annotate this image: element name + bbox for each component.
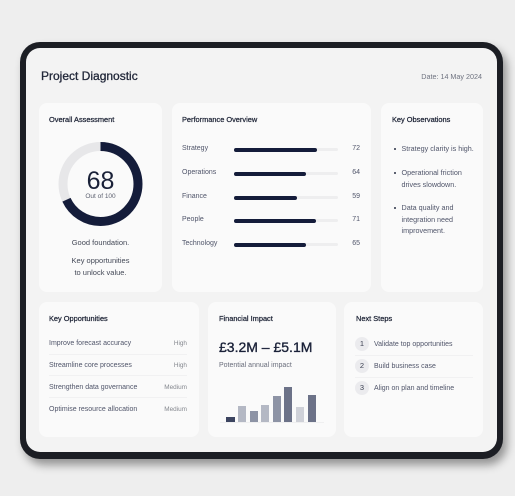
bar: operations: [234, 172, 338, 175]
row: operations: [182, 168, 360, 176]
panel: performance overview: [172, 103, 371, 292]
step 2: Build business case: [374, 363, 436, 370]
observation 1: Strategy clarity is high.: [402, 144, 474, 153]
row: people: 71: [352, 216, 360, 223]
row: people: [182, 216, 360, 223]
bar: technology: [234, 243, 338, 246]
donut gauge: [58, 142, 142, 226]
panel: key opportunities: [39, 302, 199, 437]
row: people: People: [182, 216, 204, 223]
row: strategy: [182, 145, 360, 152]
opportunity 4: Optimise resource allocation: [49, 406, 137, 413]
row: operations: 64: [352, 169, 360, 176]
panel: next steps: [344, 302, 483, 437]
panel: overall assessment: [39, 103, 162, 292]
observation 3: [394, 203, 453, 235]
donut gauge: 68: [87, 167, 114, 195]
assessment summary: Key opportunities: [72, 256, 129, 265]
row: strategy: Strategy: [182, 145, 208, 152]
opportunity 2: Streamline core processes: [49, 362, 132, 369]
opportunity 1: Improve forecast accuracy: [49, 340, 131, 347]
step 3: [355, 381, 454, 395]
step 3: Align on plan and timeline: [374, 385, 454, 392]
step 3: 3: [360, 383, 364, 392]
opportunity 2: High: [174, 362, 187, 369]
row: finance: 59: [352, 193, 360, 200]
observation 2: [394, 168, 462, 189]
bar chart: [220, 387, 324, 423]
heading: financial impact: Financial Impact: [219, 314, 273, 323]
step 1: 1: [360, 339, 364, 348]
assessment summary: to unlock value.: [74, 268, 127, 276]
step 1: [355, 337, 452, 351]
step 1: Validate top opportunities: [374, 341, 452, 348]
row: technology: 65: [352, 240, 360, 247]
heading: overall assessment: Overall Assessment: [49, 115, 114, 124]
row: technology: [182, 240, 360, 247]
row: finance: Finance: [182, 193, 207, 200]
observation 3: improvement.: [402, 226, 445, 235]
opportunity 4: Medium: [164, 406, 187, 413]
bar: people: [234, 219, 338, 222]
heading: performance overview: Performance Overview: [182, 115, 257, 124]
panel: financial impact: [208, 302, 336, 437]
row: strategy: 72: [352, 145, 360, 152]
assessment summary: [72, 238, 130, 276]
panel: key observations: [381, 103, 483, 292]
opportunity 1: [49, 340, 187, 347]
opportunity 3: Medium: [164, 384, 187, 391]
date: Date: 14 May 2024: [421, 72, 482, 81]
opportunity 2: [49, 362, 187, 369]
bar: strategy: [234, 148, 338, 151]
step 2: [355, 359, 436, 373]
step 2: 2: [360, 361, 364, 370]
tablet frame: [20, 42, 503, 459]
row: operations: Operations: [182, 169, 216, 176]
title: Project Diagnostic: [41, 69, 138, 83]
observation 2: drives slowdown.: [402, 180, 456, 189]
observation 3: Data quality and: [402, 203, 453, 212]
heading: key observations: Key Observations: [392, 115, 450, 124]
impact caption: Potential annual impact: [219, 362, 292, 369]
bar: finance: [234, 196, 338, 199]
impact value: £3.2M – £5.1M: [219, 339, 312, 355]
heading: key opportunities: Key Opportunities: [49, 314, 108, 323]
assessment summary: Good foundation.: [72, 238, 129, 247]
observation 3: integration need: [402, 215, 453, 224]
observation 2: Operational friction: [402, 168, 462, 177]
opportunity 3: [49, 384, 187, 391]
opportunity 3: Strengthen data governance: [49, 384, 137, 391]
opportunity 4: [49, 406, 187, 413]
heading: next steps: Next Steps: [356, 314, 392, 323]
dashboard screen: [26, 48, 497, 452]
opportunity 1: High: [174, 340, 187, 347]
donut gauge: Out of 100: [85, 193, 116, 200]
row: finance: [182, 192, 360, 200]
row: technology: Technology: [182, 240, 217, 247]
